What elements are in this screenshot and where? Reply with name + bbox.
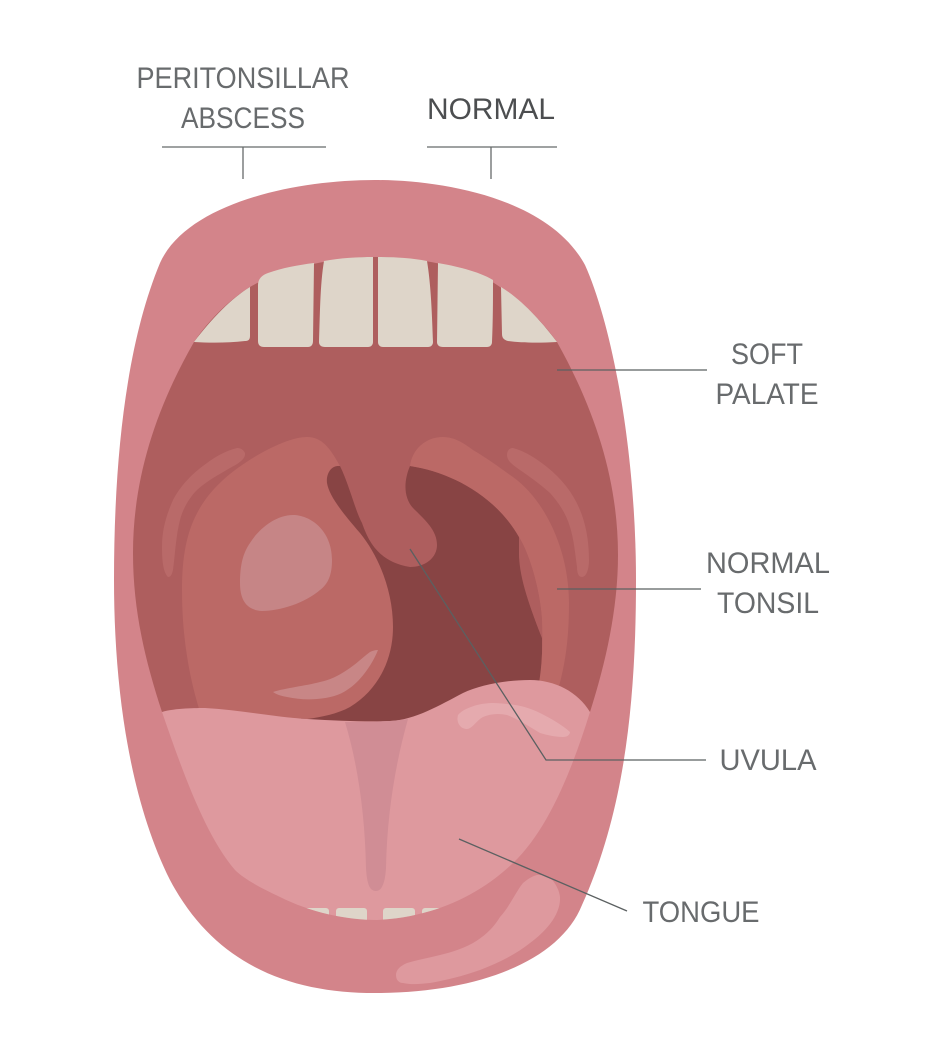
label: peritonsillar abscess: PERITONSILLAR bbox=[136, 62, 350, 95]
normal tonsil bbox=[519, 537, 542, 638]
label: peritonsillar abscess bbox=[136, 62, 350, 179]
lower tonsil highlight bbox=[273, 650, 378, 699]
right arch highlight bbox=[507, 448, 589, 577]
label: tongue: TONGUE bbox=[642, 896, 760, 929]
soft palate and uvula bbox=[340, 440, 437, 567]
right arch bbox=[410, 437, 569, 690]
mouth illustration bbox=[114, 180, 636, 993]
tongue bbox=[162, 680, 590, 920]
label: uvula: UVULA bbox=[720, 744, 816, 777]
lips bbox=[114, 180, 636, 993]
abscess swollen tonsil bbox=[182, 437, 393, 719]
label: tongue bbox=[459, 839, 760, 929]
label: normal tonsil: NORMAL bbox=[706, 547, 830, 580]
label: soft palate bbox=[557, 338, 818, 411]
label: soft palate: PALATE bbox=[716, 378, 818, 411]
mouth cavity bbox=[133, 257, 618, 712]
lip highlight bbox=[396, 875, 560, 984]
tongue highlight bbox=[457, 703, 570, 737]
upper teeth bbox=[194, 257, 557, 347]
label: normal: NORMAL bbox=[427, 93, 555, 126]
label: normal tonsil bbox=[557, 547, 830, 620]
label: normal bbox=[427, 93, 557, 179]
label: peritonsillar abscess: ABSCESS bbox=[181, 102, 305, 135]
tongue median groove bbox=[345, 719, 408, 891]
label: soft palate: SOFT bbox=[731, 338, 803, 371]
lower teeth bbox=[306, 908, 440, 920]
throat bbox=[300, 466, 542, 728]
left arch highlight bbox=[162, 448, 245, 577]
abscess highlight bbox=[240, 515, 332, 611]
label: normal tonsil: TONSIL bbox=[717, 587, 819, 620]
label: uvula bbox=[410, 549, 816, 777]
